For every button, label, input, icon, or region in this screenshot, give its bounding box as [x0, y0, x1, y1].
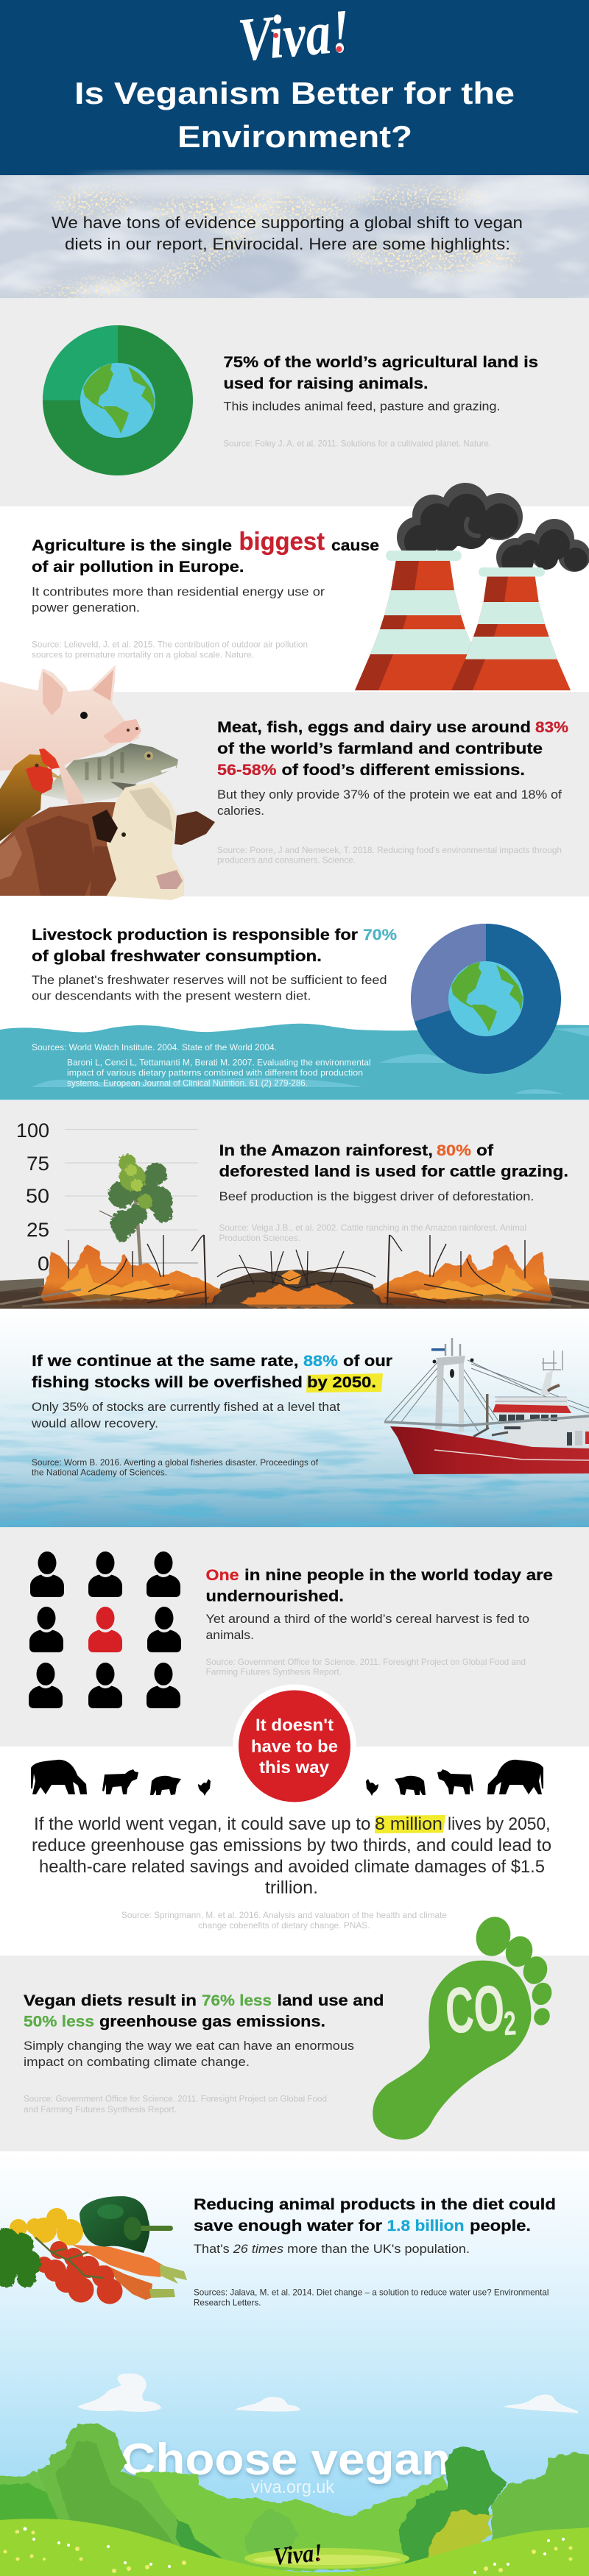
- source: Source: Government Office for Science. 2011. Foresight Project on Global Food: [24, 2093, 327, 2103]
- icon: smoke clouds: [397, 483, 589, 577]
- sources: impact of various dietary patterns combined with different food production: [67, 1067, 363, 1078]
- body text: [32, 973, 387, 1002]
- body text: That's 26 times more than the UK's population.: [194, 2242, 470, 2256]
- chart: axis and gridlines: 75: [27, 1153, 49, 1175]
- chart: axis and gridlines: [16, 1119, 198, 1275]
- body text: [31, 1400, 340, 1431]
- panel: agricultural land: [0, 298, 589, 506]
- source: [121, 1910, 447, 1931]
- chart: axis and gridlines: 25: [27, 1219, 49, 1241]
- heading: [32, 927, 397, 965]
- heading: [219, 1142, 568, 1181]
- call to action: Choose vegan: Choose vegan: [121, 2435, 451, 2484]
- body text: This includes animal feed, pasture and grazing.: [224, 399, 501, 414]
- icon grid: one in nine people: [29, 1551, 181, 1708]
- heading: [206, 1567, 553, 1604]
- heading: 50% less: [24, 2014, 94, 2030]
- panel: water saving and closing scene: [0, 2151, 589, 2576]
- source: [32, 639, 308, 659]
- callout: it doesn't have to be this way: [233, 1684, 356, 1808]
- source: Source: Springmann, M. et al. 2016. Analysis and valuation of the health and climate: [121, 1910, 447, 1920]
- heading: 80%: [437, 1142, 471, 1159]
- source: sources to premature mortality on a global scale. Nature.: [32, 649, 254, 659]
- icon: CO2 footprint: [373, 1912, 555, 2140]
- statement text: reduce greenhouse gas emissions by two thirds, and could lead to: [32, 1836, 551, 1855]
- image: fishing boat: [384, 1338, 589, 1474]
- image: vegetables: [0, 2196, 187, 2304]
- fish: [42, 743, 178, 804]
- chart: axis and gridlines: 50: [26, 1185, 49, 1207]
- body text: would allow recovery.: [31, 1416, 158, 1431]
- callout: it doesn't have to be this way: It doesn't: [255, 1715, 334, 1734]
- heading: save enough water for: [194, 2218, 382, 2234]
- source: change cobenefits of dietary change. PNAS.: [198, 1920, 370, 1931]
- clouds: [77, 2374, 578, 2413]
- source: Production Sciences.: [219, 1233, 300, 1243]
- heading: of: [476, 1142, 494, 1159]
- flowers: [16, 2527, 565, 2574]
- animal silhouettes: [31, 1760, 543, 1796]
- heading: Livestock production is responsible for: [32, 927, 358, 944]
- heading: If we continue at the same rate,: [32, 1353, 299, 1370]
- body text: [24, 2039, 354, 2069]
- heading: One: [206, 1567, 239, 1584]
- body text: [206, 1612, 529, 1642]
- body text: But they only provide 37% of the protein we eat and 18% of: [217, 788, 562, 802]
- source: Source: Worm B. 2016. Averting a global fisheries disaster. Proceedings of: [32, 1457, 319, 1468]
- source: Source: Foley J. A. et al. 2011. Solutions for a cultivated planet. Nature.: [224, 439, 491, 449]
- body text: Simply changing the way we eat can have an enormous: [24, 2039, 354, 2053]
- body text: animals.: [206, 1628, 254, 1642]
- heading: 1.8 billion: [387, 2218, 464, 2234]
- sources: Sources: World Watch Institute. 2004. State of the World 2004.: [32, 1042, 277, 1052]
- heading: Agriculture is the single: [32, 537, 232, 554]
- source: [206, 1657, 526, 1677]
- body text: [32, 584, 325, 615]
- heading: Vegan diets result in: [24, 1992, 197, 2009]
- source: Source: Lelieveld, J. et al. 2015. The contribution of outdoor air pollution: [32, 639, 308, 649]
- icon: CO2 footprint: CO: [443, 1971, 507, 2047]
- body text: [217, 788, 562, 818]
- panel: vegan diets: [0, 1912, 589, 2151]
- heading: 88%: [303, 1353, 338, 1370]
- body text: power generation.: [32, 601, 140, 615]
- panel: intro over Earth from space: [0, 172, 589, 298]
- title: Environment?: [177, 119, 412, 154]
- panel: deforestation: [0, 1100, 589, 1309]
- body text: our descendants with the present western diet.: [32, 989, 311, 1002]
- heading: Reducing animal products in the diet could: [194, 2196, 556, 2213]
- source: the National Academy of Sciences.: [32, 1468, 167, 1478]
- source: Research Letters.: [194, 2298, 261, 2308]
- heading: deforested land is used for cattle grazing.: [219, 1163, 568, 1181]
- source: Sources: Jalava, M. et al. 2014. Diet change – a solution to reduce water use? Environmental: [194, 2287, 549, 2298]
- donut chart: 75% agricultural land: [43, 325, 193, 475]
- heading: of air pollution in Europe.: [32, 559, 244, 576]
- panel: undernourished: [0, 1527, 589, 1747]
- parsley: [0, 2228, 41, 2287]
- body text: calories.: [217, 804, 264, 818]
- logo: Viva! footer: Viva!: [272, 2539, 323, 2571]
- carrots: [72, 2245, 187, 2300]
- pig: [0, 665, 141, 804]
- heading: [224, 354, 538, 392]
- heading: In the Amazon rainforest,: [219, 1142, 433, 1159]
- source: [219, 1222, 526, 1243]
- source: Source: Poore, J and Nemecek, T. 2018. Reducing food’s environmental impacts through: [217, 845, 562, 855]
- panel: air pollution: [0, 483, 589, 692]
- source: [32, 1457, 319, 1478]
- statement text: health-care related savings and avoided climate damages of $1.5: [39, 1857, 545, 1877]
- website address: viva.org.uk: [251, 2477, 335, 2497]
- icon: cooling tower large: [355, 551, 508, 690]
- chicken: [0, 749, 62, 841]
- body text: Only 35% of stocks are currently fished at a level that: [32, 1400, 340, 1414]
- panel: farmland and emissions: [0, 665, 589, 900]
- callout: it doesn't have to be this way: this way: [259, 1758, 329, 1777]
- statement text: If the world went vegan, it could save up to: [34, 1814, 370, 1834]
- statement text: [32, 1814, 551, 1897]
- heading: of food’s different emissions.: [281, 762, 525, 779]
- statement text: 8 million: [375, 1814, 442, 1834]
- body text: Yet around a third of the world’s cereal harvest is fed to: [206, 1612, 529, 1626]
- title: [74, 76, 515, 154]
- heading: 56-58%: [217, 762, 277, 779]
- source: producers and consumers. Science.: [217, 855, 356, 866]
- pepper: [80, 2196, 173, 2253]
- red tomatoes: [36, 2241, 122, 2304]
- image: farmed animals: [0, 665, 215, 900]
- heading: biggest: [239, 528, 325, 556]
- heading: [24, 1992, 384, 2030]
- water wave: [0, 1024, 589, 1101]
- body text: It contributes more than residential energy use or: [32, 584, 325, 599]
- icon: cooling tower small: [451, 567, 571, 690]
- heading: of global freshwater consumption.: [32, 948, 322, 965]
- heading: Meat, fish, eggs and dairy use around: [217, 719, 531, 736]
- heading: [194, 2196, 556, 2234]
- heading: by 2050.: [307, 1374, 376, 1391]
- body text: The planet's freshwater reserves will not be sufficient to feed: [32, 973, 387, 987]
- callout: it doesn't have to be this way: have to be: [251, 1737, 338, 1756]
- source: and Farming Futures Synthesis Report.: [24, 2104, 177, 2115]
- heading: 75% of the world’s agricultural land is: [224, 354, 538, 371]
- body text: Beef production is the biggest driver of deforestation.: [219, 1189, 535, 1203]
- body text: impact on combating climate change.: [24, 2055, 250, 2069]
- heading: undernourished.: [206, 1588, 344, 1604]
- icon: CO2 footprint: 2: [503, 2003, 517, 2042]
- heading: cause: [331, 537, 379, 554]
- source: Source: Government Office for Science. 2011. Foresight Project on Global Food and: [206, 1657, 526, 1667]
- source: [217, 845, 562, 866]
- heading: [32, 1353, 392, 1393]
- heading: fishing stocks will be overfished: [32, 1374, 303, 1391]
- heading: 76% less: [202, 1992, 272, 2009]
- heading: in nine people in the world today are: [244, 1567, 553, 1584]
- statement text: lives by 2050,: [448, 1814, 551, 1834]
- panel: vegan world: [0, 1684, 589, 1956]
- heading: land use and: [277, 1992, 384, 2009]
- intro text: We have tons of evidence supporting a global shift to vegan: [52, 213, 523, 232]
- sources: Baroni L, Cenci L, Tettamanti M, Berati M. 2007. Evaluating the environmental: [67, 1057, 371, 1067]
- panel: overfishing: [0, 1309, 589, 1527]
- heading: [217, 719, 568, 779]
- intro text: diets in our report, Envirocidal. Here are some highlights:: [65, 235, 510, 253]
- source: [24, 2093, 327, 2115]
- image: landscape: [0, 2424, 589, 2576]
- statement text: trillion.: [265, 1878, 318, 1897]
- intro text: [52, 213, 523, 253]
- heading: [32, 528, 379, 576]
- sources: systems. European Journal of Clinical Nutrition. 61 (2) 279-286.: [67, 1078, 308, 1088]
- chart: axis and gridlines: 100: [16, 1119, 49, 1142]
- sources: [32, 1042, 371, 1088]
- heading: 83%: [535, 719, 568, 736]
- panel: freshwater: [0, 901, 589, 1101]
- heading: used for raising animals.: [224, 375, 428, 392]
- panel: header: [0, 0, 589, 175]
- image: burning forest: [0, 1235, 589, 1309]
- source: Source: Veiga J.B., et al. 2002. Cattle ranching in the Amazon rainforest. Animal: [219, 1222, 526, 1233]
- heading: 70%: [363, 927, 397, 944]
- heading: of the world’s farmland and contribute: [217, 740, 543, 757]
- image: lone tree: [99, 1154, 173, 1267]
- title: Is Veganism Better for the: [74, 76, 515, 110]
- donut chart: 70% freshwater: [411, 924, 561, 1074]
- source: Farming Futures Synthesis Report.: [206, 1666, 342, 1677]
- heading: of our: [343, 1353, 392, 1370]
- source: [194, 2287, 549, 2308]
- chart: axis and gridlines: 0: [38, 1253, 49, 1275]
- yellow tomatoes: [10, 2208, 83, 2246]
- heading: greenhouse gas emissions.: [99, 2014, 325, 2030]
- heading: people.: [470, 2218, 531, 2234]
- cow: [0, 782, 215, 900]
